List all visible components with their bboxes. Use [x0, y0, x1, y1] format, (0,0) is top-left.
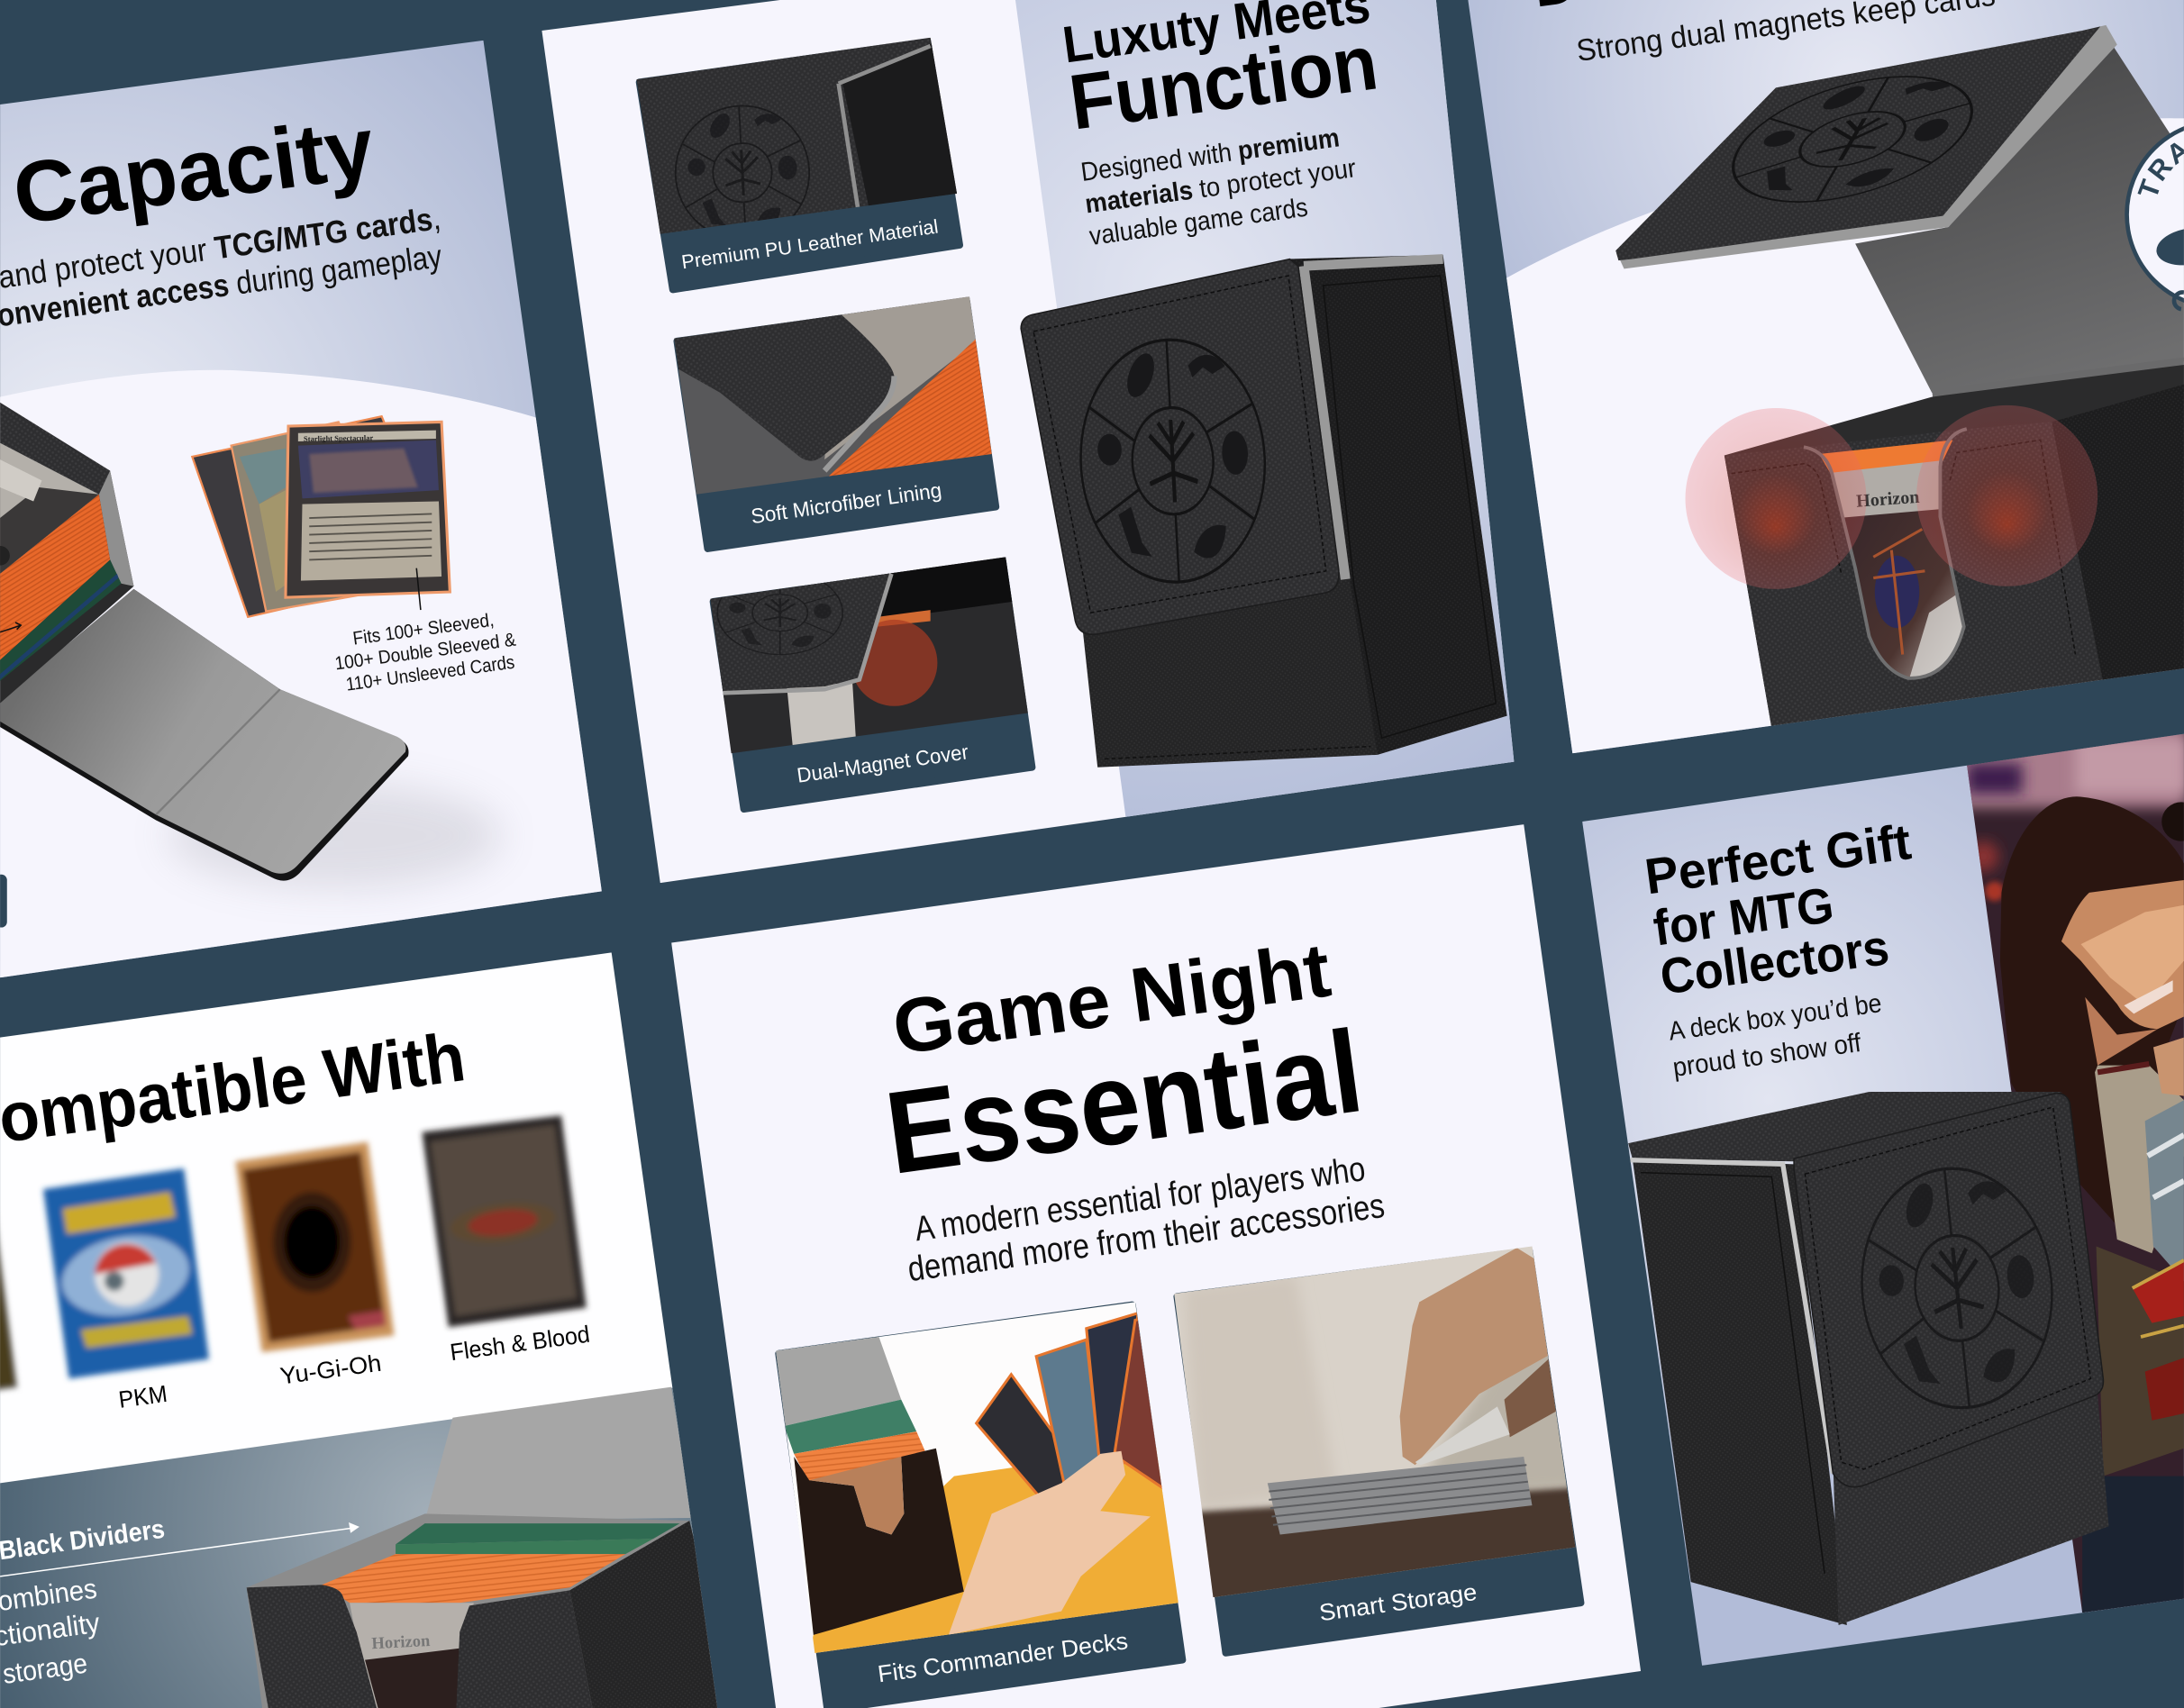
text block: dividers description: storage — [1, 1648, 89, 1690]
game card: PKM — [43, 1168, 209, 1413]
callout: black dividers — [0, 1514, 358, 1576]
label on visible card: Horizon — [371, 1631, 432, 1653]
callout text: card capacity: 100+ Double Sleeved & — [333, 630, 517, 675]
heading: game night essential: Game Night — [887, 927, 1335, 1071]
heading: capacity: Capacity — [8, 99, 379, 243]
text block: materials: materials to protect your — [1083, 153, 1358, 219]
callout line to cards — [416, 568, 421, 610]
lid — [1615, 25, 2117, 268]
fanned sleeved cards — [192, 416, 450, 617]
text block: capacity description — [0, 209, 441, 326]
text block: essential description: A modern essential for players who — [913, 1149, 1368, 1249]
heading: game night essential — [878, 927, 1370, 1199]
deck box: closed, front view — [1021, 255, 1507, 768]
icon: embossed emblem — [1075, 335, 1271, 586]
text block: materials — [1081, 132, 1355, 245]
callout text: card capacity: 110+ Unsleeved Cards — [345, 652, 516, 695]
text block: essential description: demand more from their accessories — [905, 1186, 1387, 1289]
magnet highlight: right — [1916, 405, 2098, 586]
card title: Starlight Spectacular — [304, 433, 373, 443]
panel: dual magnets — [1469, 0, 2184, 753]
shadow under open lid — [168, 783, 502, 888]
caption: Dual-Magnet Cover — [796, 740, 970, 787]
text block: materials: Designed with premium — [1079, 123, 1342, 187]
caption: Smart Storage — [1317, 1578, 1479, 1626]
heading: game night essential: Essential — [878, 1004, 1370, 1199]
game card: Yu-Gi-Oh — [235, 1142, 395, 1390]
text block: gift description: proud to show off — [1671, 1028, 1863, 1083]
heading: perfect gift: for MTG — [1650, 877, 1837, 957]
game card: first (clipped) — [0, 1194, 17, 1391]
front wall — [1724, 422, 2103, 728]
gradient side column — [1015, 0, 1532, 836]
arrow: dividers pointer — [0, 622, 21, 632]
callout text: card capacity — [335, 613, 516, 690]
text block: materials: valuable game cards — [1087, 193, 1309, 251]
heading: perfect gift: Perfect Gift — [1642, 813, 1915, 904]
text block: capacity description: and protect your TCG/MTG cards, — [0, 200, 442, 295]
heading: perfect gift: Collectors — [1657, 919, 1892, 1005]
card visible in notch — [1811, 429, 1970, 682]
panel: capacity — [0, 0, 613, 989]
caption: Soft Microfiber Lining — [750, 478, 943, 528]
photo card: commander decks — [766, 1295, 1197, 1708]
panel: compatible with — [0, 947, 738, 1708]
feature card: microfiber lining — [669, 286, 1003, 549]
callout: black dividers: Black Dividers — [0, 1514, 167, 1566]
heading: luxury meets function: Function — [1065, 19, 1383, 147]
heading: perfect gift — [1642, 813, 1915, 1005]
open deck box with dividers — [247, 1387, 738, 1708]
magnet highlight: left — [1686, 408, 1866, 589]
label: PKM — [117, 1380, 168, 1413]
arrow to dividers — [0, 1523, 358, 1576]
label on visible card: Horizon — [1855, 487, 1920, 512]
label: Yu-Gi-Oh — [278, 1349, 383, 1390]
feature card: PU leather — [627, 28, 975, 290]
clipped caption tab — [0, 875, 7, 928]
panel: luxury meets function — [529, 0, 1532, 891]
open deck box with cards — [0, 403, 408, 881]
panel: perfect gift — [1574, 724, 2184, 1685]
badge — [2125, 126, 2184, 312]
text block: gift description: A deck box you’d be — [1667, 988, 1883, 1047]
text block: dividers description — [0, 1573, 102, 1690]
open lid deck box — [1615, 25, 2184, 728]
label: Flesh & Blood — [449, 1321, 591, 1366]
feature card: dual magnet — [696, 550, 1033, 809]
photo: woman with gift — [1950, 724, 2184, 1615]
deck box: closed, angled view — [1628, 1092, 2108, 1625]
panel: game night essential — [655, 814, 1658, 1708]
photo card: smart storage — [1163, 1232, 1602, 1653]
icon: embossed emblem — [1851, 1159, 2063, 1417]
callout text: card capacity: Fits 100+ Sleeved, — [351, 610, 496, 650]
caption: Premium PU Leather Material — [680, 215, 940, 273]
caption: Fits Commander Decks — [876, 1627, 1130, 1687]
game card: Flesh and Blood — [422, 1115, 591, 1366]
text block: gift description — [1667, 988, 1883, 1083]
